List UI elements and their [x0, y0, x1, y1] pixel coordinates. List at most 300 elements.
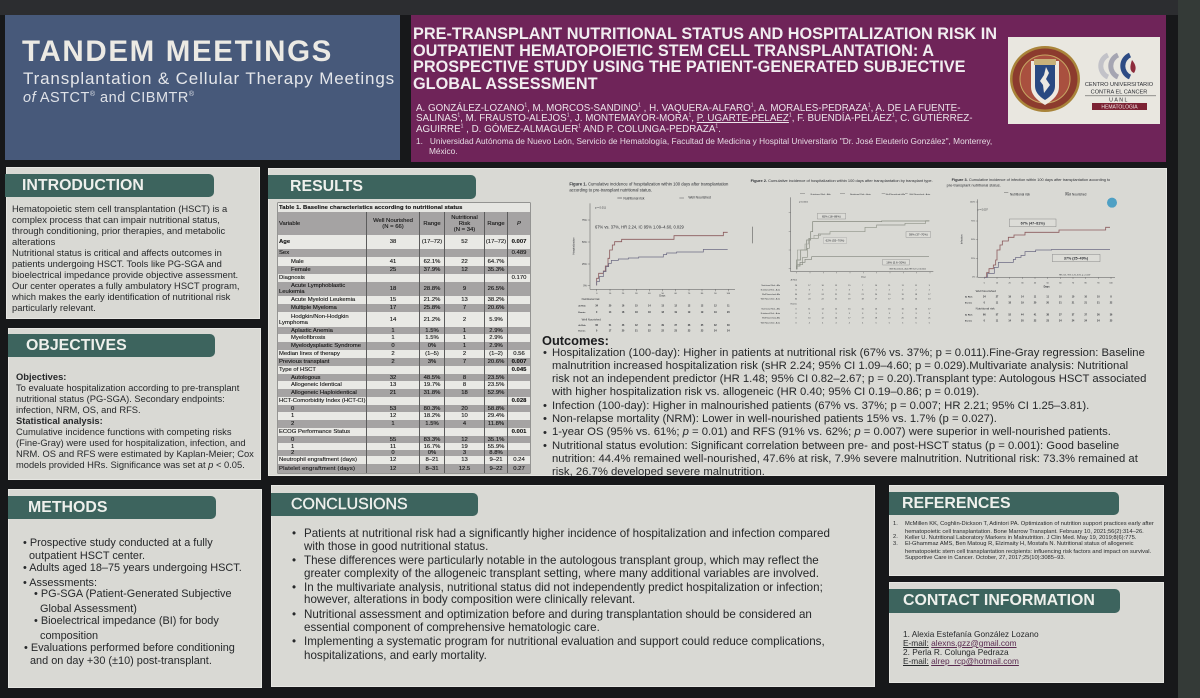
figure 1: cumulative incidence of hospitalization: Events: [578, 330, 586, 333]
heading: contact information: [889, 589, 1120, 613]
figure 3: cumulative incidence of infection: 25: [1110, 321, 1113, 323]
table 1: baseline characteristics: Allogeneic Identical: [291, 382, 342, 388]
figure 3: cumulative incidence of infection: p = 0.007: [977, 209, 988, 212]
conclusions list: •: [292, 608, 296, 620]
table 1: baseline characteristics: 0.007: [512, 359, 526, 365]
figure 1: cumulative incidence of hospitalization: 37: [674, 325, 678, 327]
table 1: baseline characteristics: Lymphoma: [279, 320, 308, 326]
figure 2: hospitalization by transplant type: 22: [822, 299, 825, 301]
figure 3: cumulative incidence of infection: [946, 178, 1117, 323]
table 1: baseline characteristics: 0.001: [512, 429, 526, 435]
risk table row labels: Well Nourished - Auto: [761, 322, 781, 325]
table 1: baseline characteristics: 38: [390, 239, 396, 245]
figure 2: hospitalization by transplant type: 20: [902, 318, 905, 320]
figure 2: hospitalization by transplant type: Well Nourished- Allo: [886, 193, 906, 196]
table 1: baseline characteristics: 35.1%: [488, 436, 504, 442]
objectives text: Statistical analysis:: [16, 416, 103, 426]
figure 3: cumulative incidence of infection: Well Nourished: [1065, 192, 1087, 196]
figure 3: cumulative incidence of infection: 24: [1059, 320, 1062, 323]
figure 2: hospitalization by transplant type: 3: [849, 313, 851, 315]
table 1: baseline characteristics: (1–2): [489, 351, 503, 357]
figure 2: hospitalization by transplant type: 8: [795, 289, 797, 291]
figure 1: cumulative incidence of hospitalization: Nutritional risk: [582, 297, 600, 301]
outcomes text: •: [543, 413, 547, 425]
figure 3: cumulative incidence of infection: Well Nourished: [976, 289, 996, 293]
table 1: baseline characteristics: 12: [461, 436, 468, 442]
figure 2: hospitalization by transplant type: 17: [862, 318, 865, 320]
table 1: baseline characteristics: 80.3%: [424, 406, 440, 412]
figure 3: cumulative incidence of infection: 22: [1110, 302, 1113, 304]
figure 1: cumulative incidence of hospitalization: 50: [661, 293, 665, 295]
outcomes text: •: [543, 400, 547, 412]
figure 2: hospitalization by transplant type: 17: [808, 285, 811, 287]
figure 1: cumulative incidence of hospitalization: 20: [727, 312, 730, 314]
logo: Centro Universitario contra el Cancer: UANL: [1109, 98, 1129, 104]
outcomes bullet list: risk not an independent predictor (HR 1.48; 95% CI 0.82–2.67; p = 0.20).Transplant type: Autologous HSCT associated: [552, 373, 1146, 385]
outcomes text: [542, 332, 1146, 476]
logo: university seal: [1010, 46, 1080, 112]
table 1: baseline characteristics: 18: [461, 390, 468, 396]
figure 3: cumulative incidence of infection: Figure 3. Cumulative incidence of infection within 100 days after transplantation according to: [952, 178, 1110, 182]
figure 2: hospitalization by transplant type: 11: [902, 285, 905, 287]
outcomes bullet list: 1-year OS (95% vs. 61%; p = 0.01) and RFS (91% vs. 62%; p = 0.007) were superior in well-nourished patients.: [552, 426, 1111, 438]
table 1: baseline characteristics: 7: [463, 359, 466, 365]
conclusions list: •: [292, 526, 296, 540]
figure 3: cumulative incidence of infection: 10: [1072, 297, 1075, 299]
figure 2: hospitalization by transplant type: 11: [888, 285, 891, 287]
affiliation: [416, 136, 992, 156]
figure 2: hospitalization by transplant type: 9: [929, 285, 931, 287]
table 1: baseline characteristics: 21.2%: [424, 316, 440, 322]
table 1: baseline characteristics: (17–72): [422, 239, 442, 245]
objectives text: [16, 372, 254, 470]
table 1: baseline characteristics: Myelodysplastic Syndrome: [291, 343, 361, 349]
table 1: baseline characteristics: 8.8%: [489, 450, 503, 456]
figure 2: hospitalization by transplant type: 19: [888, 318, 891, 320]
figure 1: cumulative incidence of hospitalization: 40: [648, 293, 651, 295]
table 1: baseline characteristics: 1: [291, 413, 294, 419]
table 1: baseline characteristics: 1.5%: [425, 328, 439, 334]
figure 2: hospitalization by transplant type: 3: [849, 289, 851, 291]
figure 3: cumulative incidence of infection: 20: [1009, 283, 1012, 285]
table 1: baseline characteristics: (N = 66): [382, 224, 404, 230]
figure 2: hospitalization by transplant type: Nutritional Risk - Auto: [850, 193, 872, 196]
table 1: baseline characteristics: (N = 34): [454, 226, 475, 232]
figure 3: cumulative incidence of infection: 10: [1059, 297, 1062, 299]
references list: 3.: [893, 540, 898, 546]
banner society line: of ASTCT® and CIBMTR®: [23, 90, 195, 106]
curve: well nourished auto: [797, 234, 821, 269]
table 1: baseline characteristics: 1.5%: [425, 421, 439, 427]
figure 2: hospitalization by transplant type: 14: [915, 299, 918, 301]
figure 2: hospitalization by transplant type: 16: [915, 308, 918, 310]
table 1: baseline characteristics: 20.6%: [488, 305, 504, 311]
figure 1: cumulative incidence of hospitalization: 23: [674, 331, 678, 333]
panel: objectives: [8, 328, 261, 480]
figure 2: hospitalization by transplant type: 19: [888, 294, 891, 296]
figure 1: cumulative incidence of hospitalization: 24: [714, 330, 717, 333]
table 1: baseline characteristics: 10: [461, 413, 468, 419]
figure 3: cumulative incidence of infection: Infection: [961, 234, 964, 244]
figure 3: cumulative incidence of infection: 11: [996, 302, 999, 304]
curve labels: 59% (37–70%): [909, 233, 928, 237]
figure 2: hospitalization by transplant type: 16: [822, 285, 825, 287]
figure 3: cumulative incidence of infection: 20: [1046, 302, 1050, 304]
figure 2: hospitalization by transplant type: 3: [875, 289, 877, 291]
figure 3: cumulative incidence of infection: 34: [983, 296, 986, 299]
table 1: baseline characteristics: Table 1. Baseline characteristics according to nutritional status: [279, 204, 462, 210]
heading: results: [268, 175, 476, 199]
table 1: baseline characteristics: 31.8%: [424, 390, 440, 396]
table 1: baseline characteristics: Hodgkin/Non-Hodgkin: [291, 314, 349, 320]
contact details: [903, 628, 1039, 666]
figure 1: cumulative incidence of hospitalization: 13: [661, 306, 665, 308]
figure 2: hospitalization by transplant type: 3: [862, 313, 864, 315]
table 1: baseline characteristics: 0.007: [512, 239, 526, 245]
figure 3: cumulative incidence of infection: 24: [1097, 320, 1100, 323]
figure 1: cumulative incidence of hospitalization: 12: [701, 306, 704, 308]
figure 3: cumulative incidence of infection: 50%: [971, 239, 975, 241]
outcomes bullet list: Non-relapse mortality (NRM): Lower in well-nourished patients 15% vs. 1.7% (p = 0.027).: [552, 413, 997, 425]
figure 1: cumulative incidence of hospitalization: Well Nourished: [582, 318, 601, 322]
table 1: baseline characteristics: 0.56: [513, 351, 525, 357]
curve: well nourished allo: [797, 257, 929, 269]
curve: nutritional risk allo: [797, 221, 929, 269]
table 1: baseline characteristics: (1–5): [425, 351, 439, 357]
figure 3: cumulative incidence of infection: 60: [1059, 283, 1062, 285]
figure 2: hospitalization by transplant type: 0: [795, 323, 797, 325]
figure 2: hospitalization by transplant type: 3: [822, 289, 824, 291]
table 1: baseline characteristics: 9: [463, 286, 466, 292]
figure 2: hospitalization by transplant type: 2: [915, 289, 917, 291]
figure 2: hospitalization by transplant type: 3: [835, 313, 837, 315]
table 1: baseline characteristics: 53: [390, 406, 396, 412]
outcomes bullet list: [543, 346, 1146, 476]
table 1: baseline characteristics: 17: [390, 305, 396, 311]
figure 1: cumulative incidence of hospitalization: 16: [622, 306, 625, 308]
figure 2: hospitalization by transplant type: 5: [889, 323, 891, 325]
figure 2: hospitalization by transplant type: 0: [795, 308, 797, 310]
heading: methods: [8, 496, 216, 519]
figure 2: hospitalization by transplant type: 16: [888, 308, 891, 310]
figure 1: cumulative incidence of hospitalization: Days: [659, 294, 666, 298]
figure 2: hospitalization by transplant type: 3: [875, 313, 877, 315]
table 1: baseline characteristics: 8: [463, 382, 466, 388]
figure 2: hospitalization by transplant type: 14: [875, 285, 878, 287]
table 1: baseline characteristics: 1.5%: [425, 335, 439, 341]
table 1: baseline characteristics: Aplastic Anemia: [291, 328, 333, 334]
table 1: baseline characteristics: 25.8%: [424, 305, 440, 311]
table 1: baseline characteristics: 35.3%: [488, 267, 504, 273]
curve: nutritional risk auto: [797, 221, 929, 269]
curve labels: 65% (18–88%): [822, 214, 841, 218]
figure 2: hospitalization by transplant type: 15: [835, 285, 838, 287]
table 1: baseline characteristics: Acute Myeloid Leukemia: [291, 297, 355, 303]
heading: conclusions: CONCLUSIONS: [291, 496, 408, 513]
figure 3: cumulative incidence of infection: 37: [1072, 315, 1075, 317]
figure 2: hospitalization by transplant type: 16: [902, 299, 905, 301]
introduction text: Our center operates a fully ambulatory HSCT program,: [12, 280, 240, 290]
figure 2: hospitalization by transplant type: Days: [861, 277, 866, 279]
table 1: baseline characteristics: 13: [390, 382, 396, 388]
figure 3: cumulative incidence of infection: 90: [1097, 283, 1100, 285]
table 1: baseline characteristics: 19.7%: [424, 382, 440, 388]
table 1: baseline characteristics: 1: [291, 444, 294, 450]
right wall strip: [1178, 0, 1200, 698]
panel: methods: [8, 489, 262, 688]
conclusions list: with those in good nutritional status.: [304, 540, 488, 552]
logo: Centro Universitario contra el Cancer: CENTRO UNIVERSITARIO: [1085, 82, 1154, 88]
poster title: PROSPECTIVE STUDY USING THE PATIENT-GENERATED SUBJECTIVE: [413, 58, 965, 76]
table 1: baseline characteristics: 21.2%: [424, 297, 440, 303]
figure 3: cumulative incidence of infection: 36: [1110, 315, 1113, 317]
figure 2: hospitalization by transplant type: 21: [915, 318, 918, 320]
table 1: baseline characteristics: 41: [390, 258, 396, 264]
figure 1: cumulative incidence of hospitalization: 42: [635, 324, 638, 327]
risk table row labels: Well Nourished- Allo: [762, 293, 781, 296]
introduction text: Nutritional status is critical and affects outcomes in: [12, 246, 222, 258]
table 1: baseline characteristics: 55.9%: [488, 444, 504, 450]
figure 2: hospitalization by transplant type: 18: [875, 318, 878, 320]
table 1: baseline characteristics: 2.9%: [489, 335, 503, 341]
figure 3: cumulative incidence of infection: 21: [1072, 302, 1075, 304]
figure 1: cumulative incidence of hospitalization: Events: [578, 311, 586, 314]
figure 2: hospitalization by transplant type: 19: [902, 294, 905, 296]
table 1: baseline characteristics: 2: [463, 316, 466, 322]
figure 2: hospitalization by transplant type: 3: [862, 289, 864, 291]
table 1: baseline characteristics: 5.9%: [489, 316, 503, 322]
table 1: baseline characteristics: [278, 203, 530, 473]
risk table row labels: Well Nourished- Allo: [762, 317, 781, 320]
table 1: baseline characteristics: 4: [463, 421, 466, 427]
figure 2: hospitalization by transplant type: 2: [929, 289, 931, 291]
table 1: baseline characteristics: 0%: [428, 343, 436, 349]
risk table row labels: Nutritional Risk - Allo: [762, 284, 781, 287]
figure 3: cumulative incidence of infection: 0: [984, 302, 986, 304]
table 1: baseline characteristics: Leukemia: [279, 289, 305, 295]
affiliation: 1. Universidad Autónoma de Nuevo León, Servicio de Hematología, Facultad de Medicina y Hospital Universitario "Dr. José Eleuterio González", Monterrey,: [416, 136, 992, 146]
introduction text: bioelectrical impedance provide objective assessment.: [12, 268, 238, 280]
methods list: • Assessments:: [23, 576, 97, 588]
figure 3: cumulative incidence of infection: 19: [1021, 302, 1024, 304]
table 1: baseline characteristics: 8: [463, 374, 466, 380]
figure 2: hospitalization by transplant type: 15: [848, 308, 851, 310]
objectives text: NRM. OS and RFS were estimated by Kaplan-Meier; Cox: [16, 448, 254, 458]
objectives text: nutritional status (PG-SGA). Secondary endpoints:: [16, 394, 225, 404]
figure 1: cumulative incidence of hospitalization: 60: [674, 293, 678, 295]
curve labels: [817, 213, 931, 265]
figure 2: hospitalization by transplant type: 11: [915, 285, 918, 287]
figure 2: hospitalization by transplant type: 15: [848, 285, 851, 287]
conclusions list: These differences were particularly notable in the autologous transplant group, which may reflect the: [304, 554, 819, 566]
figure 1: cumulative incidence of hospitalization: 36: [688, 325, 691, 327]
figure 3: cumulative incidence of infection: 66: [983, 315, 986, 317]
figure 1: cumulative incidence of hospitalization: 23: [701, 331, 704, 333]
conclusions list: Patients at nutritional risk had a significantly higher incidence of hospitalization and infection compared: [304, 526, 830, 540]
table 1: baseline characteristics: Allogeneic Haploidentical: [291, 390, 357, 396]
heading: objectives: OBJECTIVES: [26, 337, 127, 354]
figure 1: cumulative incidence of hospitalization: 18: [648, 312, 651, 314]
table 1: baseline characteristics: 21: [390, 390, 396, 396]
figure 1: cumulative incidence of hospitalization: 18: [635, 312, 638, 314]
figure 1: cumulative incidence of hospitalization: 11: [727, 306, 730, 308]
table 1: baseline characteristics: P: [517, 220, 521, 226]
figure 3: cumulative incidence of infection: 20: [1034, 302, 1037, 304]
figure 3: cumulative incidence of infection: Nutritional risk: [976, 306, 995, 310]
figure 2: hospitalization by transplant type: 16: [875, 308, 878, 310]
introduction text: patients undergoing HSCT. Tools like PG-SGA and: [12, 258, 222, 268]
figure 2: hospitalization by transplant type: 5: [915, 323, 917, 325]
table 1: baseline characteristics: 52.9%: [488, 390, 504, 396]
logo: Centro Universitario contra el Cancer: CONTRA EL CANCER: [1091, 90, 1147, 96]
table 1: baseline characteristics: 12.5: [459, 466, 470, 472]
table 1: baseline characteristics: Male: [291, 258, 304, 264]
risk table row labels: Nutritional Risk - Auto: [761, 312, 781, 315]
table 1: baseline characteristics: 52: [461, 239, 468, 245]
table 1: baseline characteristics: 0.170: [512, 275, 526, 281]
figure 3: cumulative incidence of infection: 14: [1021, 296, 1024, 299]
methods list: composition: [40, 630, 98, 642]
table 1: baseline characteristics: 13: [461, 457, 468, 463]
table 1: baseline characteristics: 0: [291, 436, 294, 442]
table 1: baseline characteristics: 1: [391, 328, 395, 334]
table 1: baseline characteristics: Sex: [279, 250, 289, 256]
references list: El-Ghammaz AMS, Ben Matoug R, Elzimaity H, Mostafa N. Nutritional status of allogeneic: [905, 540, 1134, 546]
figure 1: cumulative incidence of hospitalization: 23: [688, 331, 691, 333]
references list: Keller U. Nutritional Laboratory Markers in Malnutrition. J Clin Med. May 19, 2019;8(6):775.: [905, 534, 1136, 540]
figure 1: cumulative incidence of hospitalization: 20: [609, 306, 612, 308]
figure 3: cumulative incidence of infection: 14: [1008, 320, 1012, 323]
figure 2: hospitalization by transplant type: 14: [835, 318, 838, 320]
heading: conclusions: [271, 493, 478, 516]
figure 3: cumulative incidence of infection: Events: [965, 301, 973, 304]
table 1: baseline characteristics: 1: [463, 328, 466, 334]
table 1: baseline characteristics: Nutritional: [451, 214, 478, 220]
figure 2: hospitalization by transplant type: Events: [791, 302, 797, 305]
table 1: baseline characteristics: Previous transplant: [279, 359, 329, 365]
table 1: baseline characteristics: 9–22: [489, 466, 503, 472]
figure 2: hospitalization by transplant type: 0: [795, 313, 797, 315]
figure 2: hospitalization by transplant type: 3: [835, 289, 837, 291]
conclusions list: •: [292, 554, 296, 566]
figure 3: cumulative incidence of infection: 100%: [970, 202, 975, 204]
table 1: baseline characteristics: 7: [463, 305, 466, 311]
authors: SALINAS1, M. FRAUSTO-ALEJOS1, J. MONTEMAYOR-MORA1, P. UGARTE-PELAEZ1, F. BUENDÍA-PELÁEZ1, C. GUTIÉRREZ-: [416, 113, 972, 124]
table 1: baseline characteristics: 64.7%: [488, 258, 504, 264]
figure 2: hospitalization by transplant type: 3: [915, 313, 917, 315]
curve labels: 16% (5.6–30%): [886, 260, 906, 264]
conclusions list: •: [292, 580, 296, 594]
table 1: baseline characteristics: Diagnosis: [279, 275, 305, 281]
figure 3: cumulative incidence of infection: 22: [1034, 321, 1037, 323]
figure 2: hospitalization by transplant type: 18: [915, 294, 918, 296]
figure 2: hospitalization by transplant type: 17: [928, 308, 931, 310]
table 1: baseline characteristics: 18: [390, 286, 396, 292]
figure 1: cumulative incidence of hospitalization: 34: [595, 305, 599, 308]
figure 2: hospitalization by transplant type: 4: [849, 323, 851, 325]
table 1: baseline characteristics: 48.5%: [424, 374, 440, 380]
references list: 1.: [893, 520, 898, 526]
figure 2: hospitalization by transplant type: 27: [808, 294, 811, 296]
top wall strip: [0, 0, 1200, 15]
figure 3: cumulative incidence of infection: 57: [996, 315, 999, 317]
methods list: • Bioelectrical impedance (BI) for body: [34, 614, 219, 626]
figure 3: cumulative incidence of infection: 10: [1097, 297, 1100, 299]
curve: nutritional risk: [984, 227, 1110, 277]
figure 1: cumulative incidence of hospitalization: 19: [701, 312, 704, 314]
panel: references: [889, 485, 1164, 576]
figure 3: cumulative incidence of infection: 8: [1110, 297, 1112, 299]
references list: 2.: [893, 534, 898, 540]
figure 1: cumulative incidence of hospitalization: [569, 182, 735, 333]
table 1: baseline characteristics: 3: [463, 450, 466, 456]
outcomes text: •: [543, 440, 547, 452]
references list: Supportive Care in Cancer. October, 27, 2017;25(10):3085–93.: [905, 554, 1065, 560]
figure 1: cumulative incidence of hospitalization: 32: [714, 325, 717, 327]
figure 3: cumulative incidence of infection: 0: [984, 321, 986, 323]
table 1: baseline characteristics: 0: [391, 450, 395, 456]
table 1: baseline characteristics: 9–21: [489, 457, 503, 463]
table 1: baseline characteristics: 28.8%: [424, 286, 440, 292]
objectives text: Objectives:: [16, 372, 66, 382]
methods list: Global Assessment): [40, 602, 137, 614]
authors: [416, 102, 972, 135]
risk table row labels: Nutritional Risk - Allo: [762, 307, 781, 310]
figure 3: cumulative incidence of infection: 24: [1072, 320, 1075, 323]
figure 1: cumulative incidence of hospitalization: 0%: [583, 285, 587, 287]
figure 2: hospitalization by transplant type: 4: [862, 323, 864, 325]
table 1: baseline characteristics: 37.9%: [424, 267, 440, 273]
contact details: 2. Perla R. Colunga Pedraza: [903, 647, 1009, 657]
table 1: baseline characteristics: 0%: [428, 450, 436, 456]
table 1: baseline characteristics: 1: [463, 335, 466, 341]
table 1: baseline characteristics: 15: [390, 297, 396, 303]
methods list: and on day +30 (±10) post-transplant.: [30, 654, 212, 666]
figure 1: cumulative incidence of hospitalization: 17: [609, 331, 612, 333]
figure 2: hospitalization by transplant type: 15: [862, 308, 865, 310]
figure 1: cumulative incidence of hospitalization: 51: [609, 325, 612, 327]
figure 1: cumulative incidence of hospitalization: Figure 1. Cumulative incidence of hospitalization within 100 days after transplantation: [569, 182, 729, 187]
figure 1: cumulative incidence of hospitalization: 12: [688, 306, 691, 308]
figure 1: cumulative incidence of hospitalization: 66: [595, 325, 599, 327]
figure 3: cumulative incidence of infection: 70: [1072, 283, 1075, 285]
figure 3: cumulative incidence of infection: 75%: [971, 221, 975, 223]
methods list: • PG-SGA (Patient-Generated Subjective: [34, 588, 232, 600]
figure 2: hospitalization by transplant type: 10: [808, 318, 811, 320]
table 1: baseline characteristics: 8–21: [425, 457, 439, 463]
figure 2: hospitalization by transplant type: 4: [809, 323, 811, 325]
figure 3: cumulative incidence of infection: 11: [1046, 297, 1050, 299]
figure 1: cumulative incidence of hospitalization: 19: [674, 312, 678, 314]
conclusions list: greater complexity of the allogeneic transplant setting, where many additional variables are involved.: [304, 566, 819, 580]
outcomes bullet list: nutrition: 44.4% remained well-nourished, 47.6% at risk, 7.9% severe malnutrition. Nutritional risk: 73.3% remained at: [552, 453, 1138, 465]
figure 1: cumulative incidence of hospitalization: 40: [648, 324, 651, 327]
table 1: baseline characteristics: 25: [390, 267, 396, 273]
table 1: baseline characteristics: 1: [391, 335, 395, 341]
figure 1: cumulative incidence of hospitalization: 25%: [582, 264, 587, 266]
table 1: baseline characteristics: 3%: [428, 359, 436, 365]
figure 1: cumulative incidence of hospitalization: 22: [661, 331, 665, 333]
figure 3: cumulative incidence of infection: Events: [965, 320, 973, 323]
figure 1: cumulative incidence of hospitalization: 0: [596, 331, 598, 333]
figure 3: cumulative incidence of infection: 100: [1109, 283, 1114, 285]
figure 2: hospitalization by transplant type: 34: [795, 294, 798, 296]
figure 3: cumulative incidence of infection: pre-transplant nutritional status.: [947, 183, 1001, 187]
figure 1: cumulative incidence of hospitalization: 22: [648, 331, 651, 333]
figure 3: cumulative incidence of infection: HR 2.21, 95% 1.25–3.81, p = 0.007: [1059, 275, 1091, 277]
heading: contact information: CONTACT INFORMATION: [903, 592, 1095, 609]
figure 3: cumulative incidence of infection: 11: [996, 321, 999, 323]
